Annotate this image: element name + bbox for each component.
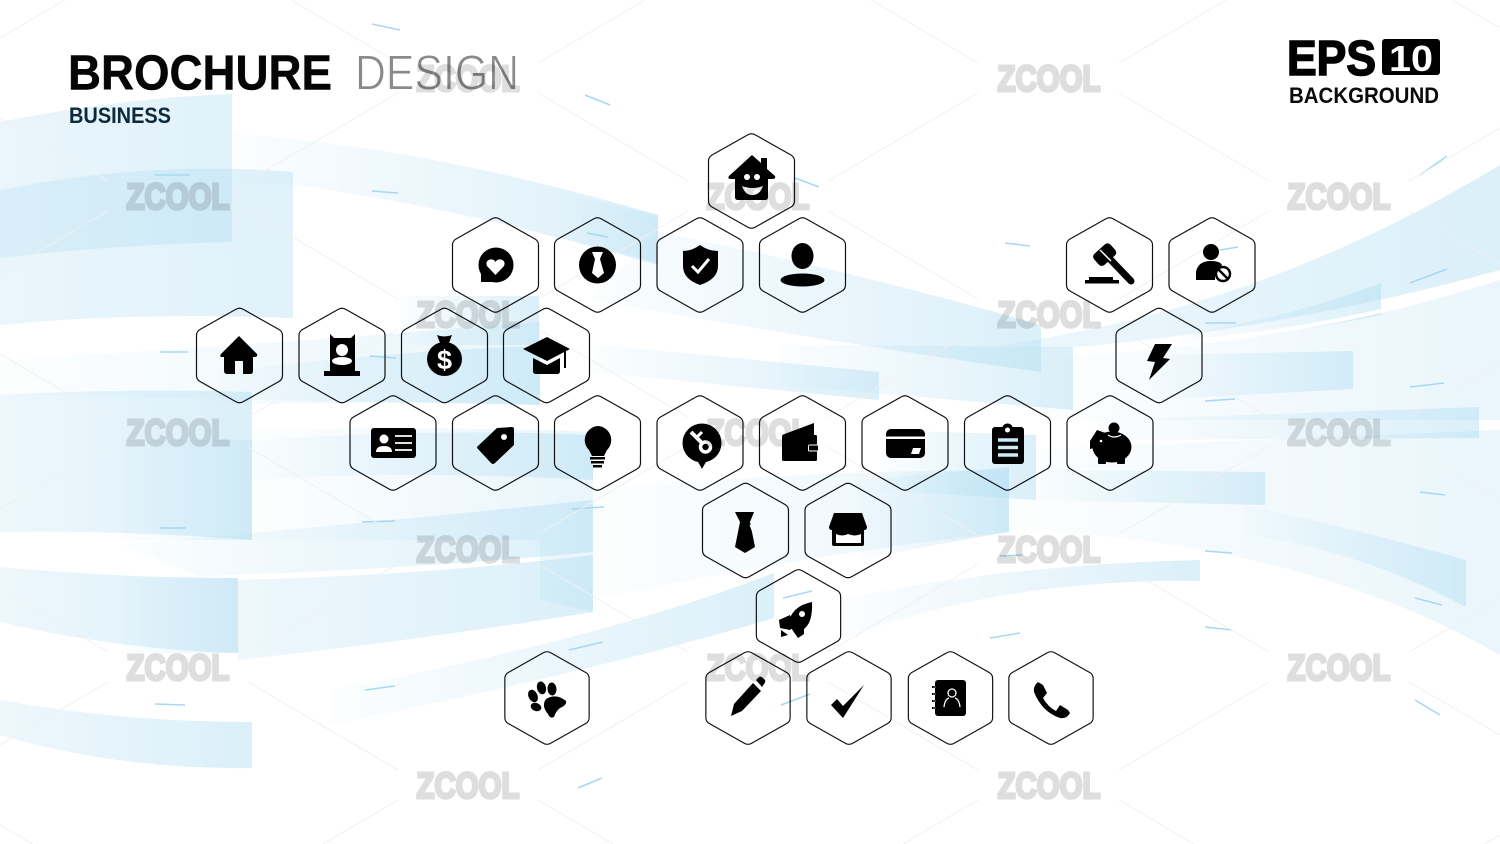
icon: id card — [350, 396, 436, 490]
background ribbons — [0, 94, 1500, 768]
zcool watermarks: ZCOOL — [126, 412, 230, 453]
icon: bank card — [862, 396, 948, 490]
icon: check mark — [807, 652, 891, 744]
zcool watermarks: ZCOOL — [126, 647, 230, 688]
icon: necktie — [702, 483, 788, 578]
badge: eps 10 background: 10 — [1389, 38, 1433, 79]
zcool watermarks: ZCOOL — [706, 647, 810, 688]
icon: pencil — [706, 652, 790, 744]
zcool watermarks: ZCOOL — [1288, 176, 1390, 217]
icon: person — [760, 218, 846, 312]
zcool watermarks — [126, 58, 1390, 806]
icon: telephone — [1009, 652, 1093, 744]
zcool watermarks: ZCOOL — [998, 765, 1100, 806]
icon: portrait stand — [299, 308, 385, 403]
title: brochure design: BROCHURE — [68, 46, 332, 100]
zcool watermarks: ZCOOL — [1288, 647, 1390, 688]
title: brochure design — [68, 46, 519, 100]
small blue streaks — [155, 24, 1447, 788]
icon: wallet — [760, 396, 846, 490]
zcool watermarks: ZCOOL — [416, 529, 520, 570]
icon: gavel — [1066, 218, 1152, 312]
icon: smiling house — [708, 134, 794, 228]
zcool watermarks: ZCOOL — [706, 176, 810, 217]
icon: home — [196, 308, 282, 403]
icon: graduation cap — [504, 308, 590, 403]
icon: rocket — [756, 570, 841, 662]
icon: storefront — [805, 483, 891, 578]
icon: address book — [908, 652, 993, 744]
zcool watermarks: ZCOOL — [416, 58, 520, 99]
icon: heart chat bubble — [452, 218, 538, 312]
icon: light bulb — [554, 396, 640, 490]
zcool watermarks: ZCOOL — [126, 176, 230, 217]
hexagon icon cluster — [196, 134, 1255, 744]
zcool watermarks: ZCOOL — [998, 294, 1100, 335]
zcool watermarks: ZCOOL — [1288, 412, 1390, 453]
subtitle: business: BUSINESS — [69, 103, 171, 128]
zcool watermarks: ZCOOL — [416, 765, 520, 806]
icon: money bag — [402, 308, 488, 403]
icon: key in map pin — [657, 396, 743, 490]
icon: clipboard — [964, 396, 1050, 490]
icon: tie in circle — [554, 218, 640, 312]
zcool watermarks: ZCOOL — [998, 529, 1100, 570]
badge: eps 10 background: EPS — [1287, 32, 1376, 86]
icon: money bag: $ — [437, 345, 452, 375]
zcool watermarks: ZCOOL — [416, 294, 520, 335]
icon: piggy bank — [1067, 396, 1153, 490]
icon: price tag — [452, 396, 538, 490]
badge: eps 10 background: BACKGROUND — [1289, 83, 1439, 108]
zcool watermarks: ZCOOL — [998, 58, 1100, 99]
icon: paw print — [505, 652, 589, 744]
icon: shield check — [657, 218, 743, 312]
title: brochure design: DESIGN — [355, 46, 519, 100]
icon: blocked user — [1169, 218, 1255, 312]
zcool watermarks: ZCOOL — [706, 412, 810, 453]
badge: eps 10 background — [1287, 32, 1440, 108]
icon: lightning bolt — [1116, 308, 1202, 403]
